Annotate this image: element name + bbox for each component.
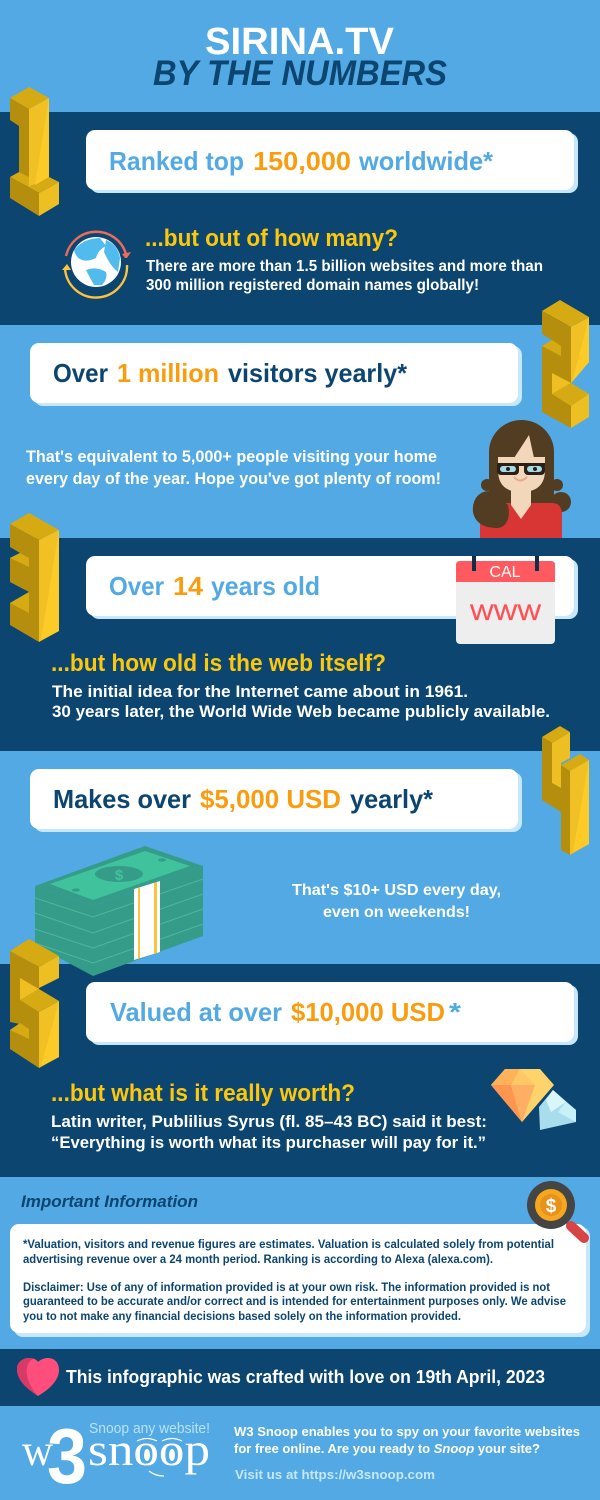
card: makes over	[30, 769, 522, 832]
heading: age of the web: ...but how old is the web itself?	[51, 650, 386, 677]
card: valued at	[86, 982, 578, 1045]
card: disclaimer: you to not make any financial decisions based solely on the information provided.	[23, 1311, 461, 1323]
logo: w3snoop	[22, 1412, 210, 1500]
icon: magnifying glass with dollar: $	[546, 1196, 557, 1217]
icon: calendar: CAL	[489, 564, 521, 581]
text: about W3 Snoop: W3 Snoop enables you to spy on your favorite websites	[234, 1425, 580, 1439]
text: about W3 Snoop: for free online. Are you ready to Snoop your site?	[234, 1442, 540, 1456]
card: years old: Over	[109, 571, 164, 601]
text: websites count: There are more than 1.5 billion websites and more than	[146, 258, 543, 275]
panel: crafted banner	[17, 1358, 545, 1396]
text: home visitors	[26, 448, 441, 488]
card: ranked top: Ranked top	[109, 146, 244, 176]
title: BY THE NUMBERS	[153, 54, 447, 93]
card: disclaimer: *Valuation, visitors and revenue figures are estimates. Valuation is calculated solely from potential	[23, 1239, 554, 1251]
logo: w3snoop: w	[22, 1426, 53, 1475]
title	[153, 21, 447, 93]
card: visitors: visitors yearly*	[228, 358, 408, 388]
card: visitors	[30, 343, 522, 406]
card: disclaimer	[10, 1224, 590, 1337]
text: Syrus quote: Latin writer, Publilius Syrus (fl. 85–43 BC) said it best:	[51, 1113, 487, 1131]
text: home visitors: every day of the year. Hope you've got plenty of room!	[26, 470, 441, 488]
title: SIRINA.TV	[205, 21, 395, 63]
text: crafted with love: This infographic was crafted with love on 19th April, 2023	[66, 1367, 545, 1387]
card: disclaimer: guaranteed to be accurate and/or correct and is intended for entertainment purposes only. We advise	[23, 1296, 566, 1308]
card: ranked top	[86, 130, 578, 193]
logo: w3snoop: snoop	[88, 1424, 210, 1475]
icon: stack of money: $	[115, 867, 124, 884]
icon: number 2	[542, 300, 589, 428]
card: valued at: $10,000 USD	[291, 997, 445, 1027]
text: Syrus quote: “Everything is worth what its purchaser will pay for it.”	[51, 1134, 486, 1152]
card: years old: 14	[173, 571, 204, 601]
icon: calendar: WWW	[470, 600, 541, 625]
icon: heart	[17, 1358, 59, 1396]
text: daily revenue	[292, 882, 501, 921]
card: makes over: $5,000 USD	[200, 784, 341, 814]
text: home visitors: That's equivalent to 5,000+ people visiting your home	[26, 448, 437, 466]
card: visitors: Over	[53, 358, 108, 388]
icon: stack of money	[35, 846, 203, 976]
text: about W3 Snoop	[234, 1425, 580, 1456]
panel: revenue	[30, 726, 589, 976]
panel: value	[10, 939, 578, 1152]
card: disclaimer: advertising revenue over a 24 month period. Ranking is according to Alexa (alexa.com).	[23, 1254, 493, 1266]
icon: number 5	[10, 939, 59, 1068]
card: valued at: *	[449, 997, 462, 1027]
icon: diamonds	[491, 1069, 576, 1130]
card: years old: years old	[211, 571, 320, 601]
text: internet history: The initial idea for the Internet came about in 1961.	[52, 683, 468, 701]
logo: w3snoop: Snoop any website!	[89, 1420, 210, 1437]
logo: w3snoop: 3	[47, 1412, 87, 1500]
icon: number 1	[10, 87, 59, 216]
card: ranked top: worldwide*	[358, 146, 494, 176]
icon: woman with glasses	[473, 420, 571, 538]
icon: number 4	[542, 726, 589, 855]
card: makes over: yearly*	[350, 784, 434, 814]
text: websites count: 300 million registered domain names globally!	[146, 277, 479, 294]
card: ranked top: 150,000	[253, 146, 351, 176]
text: internet history: 30 years later, the World Wide Web became publicly available.	[52, 703, 550, 721]
icon: magnifying glass with dollar	[527, 1181, 584, 1238]
text: internet history	[52, 683, 550, 721]
heading: out of how many: ...but out of how many?	[145, 225, 398, 252]
panel: rank	[10, 87, 578, 298]
panel: age	[10, 513, 578, 721]
card: visitors: 1 million	[117, 358, 219, 388]
card: disclaimer: Disclaimer: Use of any of information provided is at your own risk. The information provided is not	[23, 1282, 550, 1294]
icon: globe	[62, 232, 131, 298]
heading: what is it worth: ...but what is it really worth?	[51, 1080, 355, 1107]
text: Syrus quote	[51, 1113, 487, 1152]
icon: number 3	[10, 513, 59, 642]
text: websites count	[146, 258, 543, 294]
text: visit link: Visit us at https://w3snoop.com	[235, 1468, 435, 1482]
text: daily revenue: That's $10+ USD every day,	[292, 882, 501, 899]
heading: important information: Important Information	[21, 1192, 198, 1211]
card: years old	[86, 556, 578, 619]
card: valued at: Valued at over	[110, 997, 282, 1027]
card: makes over: Makes over	[53, 784, 191, 814]
panel: visitors	[26, 300, 589, 538]
panel: footer	[22, 1412, 580, 1500]
panel: important information	[10, 1181, 590, 1337]
text: daily revenue: even on weekends!	[323, 904, 470, 921]
icon: calendar	[456, 556, 555, 644]
